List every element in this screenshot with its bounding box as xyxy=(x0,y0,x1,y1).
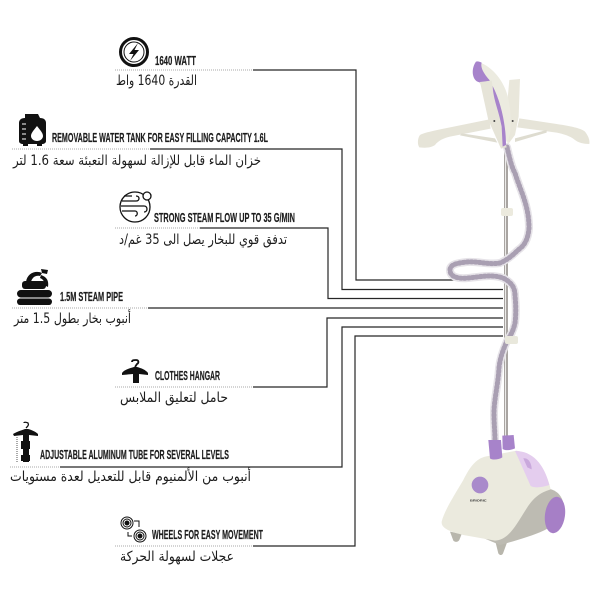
hose clip xyxy=(505,336,518,344)
feature: adjustable tube xyxy=(10,422,251,485)
label: English: WHEELS FOR EASY MOVEMENT xyxy=(152,527,263,542)
icon: hanger xyxy=(122,360,148,383)
purple grip xyxy=(473,61,490,82)
purple strip xyxy=(493,86,506,147)
feature: wheels xyxy=(120,517,263,565)
hanger struts xyxy=(460,130,547,143)
base unit xyxy=(442,435,567,555)
hanger and steam head xyxy=(418,61,589,149)
icon: adjustable tube xyxy=(13,422,38,462)
bracket pivots xyxy=(493,120,514,122)
bracket left upright xyxy=(480,81,507,149)
label: Arabic: عجلات لسهولة الحركة xyxy=(120,549,234,565)
label: English: ADJUSTABLE ALUMINUM TUBE FOR SEVERAL LEVELS xyxy=(40,447,229,462)
hose and pole collars xyxy=(488,435,515,459)
feet xyxy=(450,532,507,555)
steamer pole xyxy=(504,150,508,440)
label: Arabic: أنبوب بخار بطول 1.5 متر xyxy=(13,309,131,327)
feature: steam flow xyxy=(119,192,295,248)
brand label: BRIORIC xyxy=(470,499,488,503)
cream body xyxy=(442,451,551,541)
feature: clothes hangar xyxy=(120,360,228,406)
product: garment steamer xyxy=(418,61,589,555)
bracket right upright xyxy=(506,79,520,144)
wheel xyxy=(543,495,567,535)
steam hose xyxy=(450,147,529,442)
icon: lightning bolt xyxy=(120,38,148,66)
leader lines xyxy=(10,70,503,546)
label: English: 1640 WATT xyxy=(155,53,196,68)
steam head body xyxy=(474,62,511,144)
label: Arabic: القدرة 1640 واط xyxy=(116,73,197,89)
icon: wheels xyxy=(121,517,146,542)
pole clip xyxy=(501,208,513,216)
rear grey shell xyxy=(480,488,564,545)
water tank xyxy=(515,451,549,487)
label: Arabic: تدفق قوي للبخار يصل الى 35 غم/د xyxy=(119,232,287,248)
label: English: STRONG STEAM FLOW UP TO 35 G/MIN xyxy=(154,210,295,225)
hanger arms xyxy=(418,118,589,148)
label: English: REMOVABLE WATER TANK FOR EASY FILLING CAPACITY 1.6L xyxy=(52,130,268,145)
label: Arabic: أنبوب من الألمنيوم قابل للتعديل لعدة مستويات xyxy=(10,467,251,485)
feature: steam pipe xyxy=(13,269,131,327)
control knob xyxy=(472,477,488,493)
icon: water tank xyxy=(19,114,46,146)
feature: water tank xyxy=(12,114,268,169)
label: Arabic: حامل لتعليق الملابس xyxy=(120,390,228,406)
label: Arabic: خزان الماء قابل للإزالة لسهولة التعبئة سعة 1.6 لتر xyxy=(12,153,261,169)
icon: steam xyxy=(120,192,151,222)
label: English: 1.5M STEAM PIPE xyxy=(60,289,123,304)
icon: coiled pipe xyxy=(17,269,52,305)
feature: 1640 watt xyxy=(116,38,197,89)
label: English: CLOTHES HANGAR xyxy=(155,368,220,383)
